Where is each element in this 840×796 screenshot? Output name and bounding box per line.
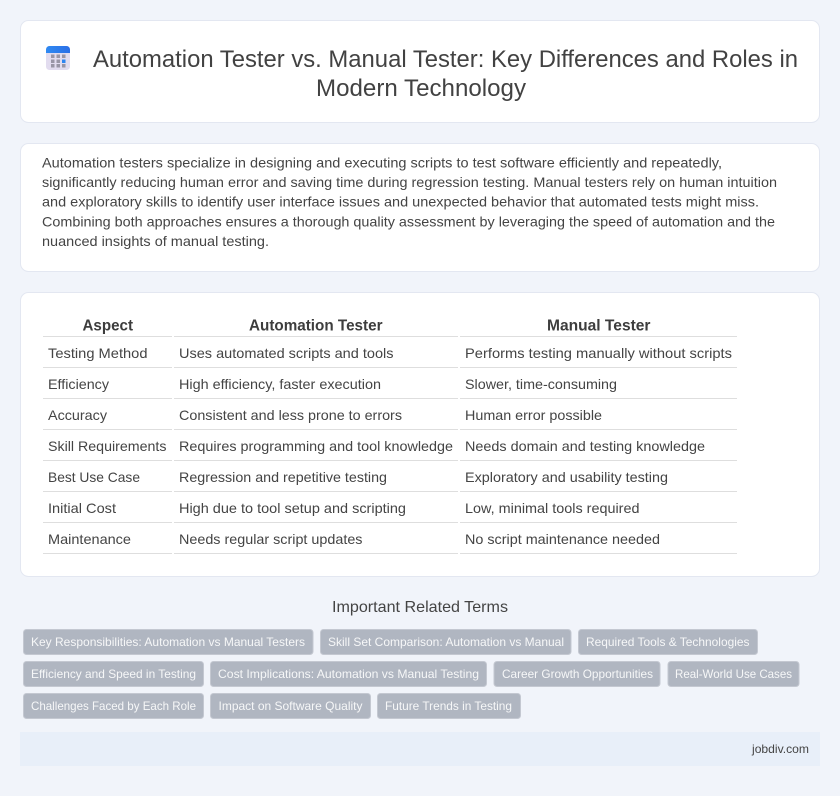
row: accuracy: Human error possible bbox=[465, 407, 602, 423]
table header row: Automation Tester bbox=[249, 318, 382, 334]
row: initial cost: Initial Cost bbox=[48, 500, 116, 516]
row: best use case: Exploratory and usability testing bbox=[465, 469, 668, 485]
tag: Real-World Use Cases bbox=[675, 667, 792, 681]
panel: comparison table bbox=[20, 292, 820, 576]
row: initial cost bbox=[43, 500, 737, 523]
row: efficiency: Efficiency bbox=[48, 376, 109, 392]
tag: Career Growth Opportunities bbox=[502, 667, 653, 681]
panel: title header bbox=[20, 20, 820, 122]
panel: introduction paragraph: significantly reducing human error and saving time during regression testing. Manual testers rely on human intuition bbox=[42, 174, 777, 190]
row: testing method: Testing Method bbox=[48, 345, 148, 361]
row: skill requirements: Skill Requirements bbox=[48, 438, 166, 454]
row: maintenance: No script maintenance needed bbox=[465, 531, 660, 547]
panel: introduction paragraph: Automation testers specialize in designing and executing scripts to test software efficiently and repeatedly, bbox=[42, 154, 722, 170]
panel: introduction paragraph bbox=[20, 144, 820, 272]
row: efficiency: Slower, time-consuming bbox=[465, 376, 617, 392]
tag bbox=[578, 630, 758, 654]
tag: Challenges Faced by Each Role bbox=[31, 699, 196, 713]
table header row: Aspect bbox=[82, 318, 134, 334]
row: accuracy bbox=[43, 407, 737, 430]
row: best use case: Best Use Case bbox=[48, 469, 140, 485]
tag: Required Tools & Technologies bbox=[586, 635, 750, 649]
row: maintenance: Maintenance bbox=[48, 531, 131, 547]
row: testing method: Uses automated scripts and tools bbox=[179, 345, 394, 361]
row: accuracy: Accuracy bbox=[48, 407, 107, 423]
title text: Modern Technology bbox=[316, 75, 526, 102]
row: initial cost: Low, minimal tools required bbox=[465, 500, 640, 516]
title text bbox=[93, 46, 798, 102]
footer: jobdiv.com bbox=[751, 742, 809, 756]
row: efficiency: High efficiency, faster execution bbox=[179, 376, 381, 392]
row: skill requirements: Needs domain and testing knowledge bbox=[465, 438, 705, 454]
table header row bbox=[43, 318, 737, 337]
row: accuracy: Consistent and less prone to errors bbox=[179, 407, 402, 423]
row: skill requirements: Requires programming and tool knowledge bbox=[179, 438, 453, 454]
tag: Efficiency and Speed in Testing bbox=[31, 667, 196, 681]
tag bbox=[320, 630, 571, 654]
tag bbox=[210, 694, 370, 718]
tag: Future Trends in Testing bbox=[385, 699, 512, 713]
row: skill requirements bbox=[43, 438, 737, 461]
row: maintenance: Needs regular script updates bbox=[179, 531, 362, 547]
panel: introduction paragraph: Combining both approaches ensures a thorough quality assessment by leveraging the speed of automation and the bbox=[42, 213, 775, 229]
tag: Impact on Software Quality bbox=[218, 699, 362, 713]
related terms tags bbox=[24, 630, 799, 718]
row: best use case: Regression and repetitive testing bbox=[179, 469, 387, 485]
heading: important related terms: Important Related Terms bbox=[332, 599, 508, 616]
tag bbox=[668, 662, 799, 686]
tag bbox=[378, 694, 520, 718]
footer bbox=[20, 732, 820, 766]
panel: introduction paragraph: and exploratory skills to identify user interface issues and unexpected behavior that automated tests might miss. bbox=[42, 194, 759, 210]
row: testing method bbox=[43, 345, 737, 368]
tag: Skill Set Comparison: Automation vs Manual bbox=[328, 635, 564, 649]
icon: calendar bbox=[46, 46, 70, 70]
tag bbox=[210, 662, 486, 686]
row: testing method: Performs testing manually without scripts bbox=[465, 345, 732, 361]
table header row: Manual Tester bbox=[547, 318, 650, 334]
tag bbox=[24, 694, 204, 718]
tag bbox=[494, 662, 660, 686]
row: maintenance bbox=[43, 531, 737, 554]
row: efficiency bbox=[43, 376, 737, 399]
tag: Cost Implications: Automation vs Manual Testing bbox=[218, 667, 479, 681]
tag bbox=[24, 630, 313, 654]
title text: Automation Tester vs. Manual Tester: Key Differences and Roles in bbox=[93, 46, 798, 73]
tag: Key Responsibilities: Automation vs Manual Testers bbox=[31, 635, 305, 649]
row: best use case bbox=[43, 469, 737, 492]
tag bbox=[24, 662, 204, 686]
row: initial cost: High due to tool setup and scripting bbox=[179, 500, 406, 516]
panel: introduction paragraph: nuanced insights of manual testing. bbox=[42, 233, 269, 249]
